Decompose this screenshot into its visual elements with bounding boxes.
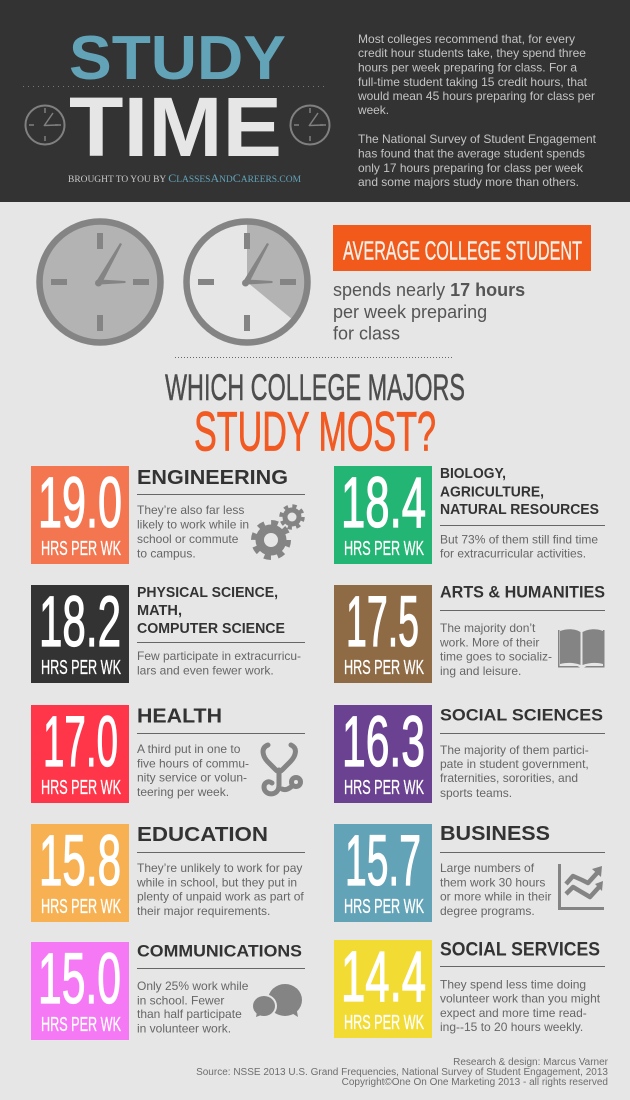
description: The majority of them partici- (440, 743, 589, 757)
icon: large clock, full (40, 222, 160, 342)
description: volunteer work than you might (440, 992, 601, 1006)
heading: ARTS & HUMANITIES (440, 582, 605, 602)
panel: arts and humanities (334, 582, 605, 683)
heading: BUSINESS (440, 823, 550, 845)
description: lars and even fewer work. (137, 664, 274, 678)
stat: 18.4 hours (334, 464, 432, 564)
stat: 19.0 hours: 19.0 (38, 464, 122, 543)
footer credits: Source: NSSE 2013 U.S. Grand Frequencies, National Survey of Student Engagement, 2013 (196, 1067, 608, 1078)
heading: which college majors study most: WHICH COLLEGE MAJORS (165, 367, 465, 408)
heading (440, 466, 599, 518)
footer credits: Research & design: Marcus Varner (453, 1057, 609, 1068)
stat: 16.3 hours (334, 703, 432, 803)
description: They spend less time doing (440, 978, 586, 992)
description: in volunteer work. (137, 1022, 231, 1036)
description: Few participate in extracurricu- (137, 649, 301, 663)
footer credits: Copyright©One On One Marketing 2013 - all rights reserved (342, 1077, 608, 1088)
panel: business (334, 822, 605, 922)
intro paragraph 2: only 17 hours preparing for class per week (358, 161, 584, 175)
stat: 17.0 hours (31, 703, 129, 803)
description: while in school, but they put in (136, 876, 297, 890)
stat: 15.0 hours: HRS PER WK (41, 1014, 121, 1036)
description (440, 532, 598, 560)
description (136, 861, 304, 918)
icon: small clock right (290, 106, 330, 144)
description: pate in student government, (440, 757, 589, 771)
heading: COMMUNICATIONS (137, 942, 302, 960)
description: They’re also far less (137, 503, 244, 517)
description: than half participate (137, 1007, 242, 1021)
stat: 18.4 hours: HRS PER WK (344, 538, 424, 560)
footer credits (196, 1057, 609, 1088)
description: their major requirements. (137, 904, 270, 918)
stat: 15.0 hours: 15.0 (38, 940, 121, 1019)
stat: 19.0 hours (31, 464, 129, 564)
stat: 17.0 hours: 17.0 (43, 703, 118, 782)
stat: 15.8 hours: HRS PER WK (41, 896, 121, 918)
description: ing and leisure. (440, 664, 521, 678)
description: Large numbers of (440, 861, 535, 875)
heading: EDUCATION (137, 824, 268, 846)
description (440, 743, 589, 800)
description: They’re unlikely to work for pay (137, 861, 302, 875)
panel: engineering (31, 464, 305, 564)
description: ing--15 to 20 hours weekly. (440, 1020, 583, 1034)
description: work. More of their (439, 636, 539, 650)
description: five hours of commu- (137, 756, 249, 770)
description (440, 861, 551, 918)
intro paragraph 1: hours per week preparing for class. For a (358, 60, 577, 74)
intro paragraph 1: credit hour students take, they spend three (358, 46, 586, 60)
stat: 18.4 hours: 18.4 (341, 464, 426, 543)
icon: small clock left (26, 106, 64, 144)
description: in school. Fewer (137, 994, 224, 1008)
description: sports teams. (440, 786, 512, 800)
callout: average college student: per week preparing (333, 302, 487, 322)
callout: average college student: for class (333, 324, 400, 344)
description: fraternities, sororities, and (440, 771, 578, 785)
description (137, 979, 249, 1036)
description (440, 978, 601, 1034)
title: Time: TIME (69, 80, 282, 174)
heading: HEALTH (137, 706, 222, 728)
heading: NATURAL RESOURCES (440, 502, 599, 518)
description: them work 30 hours (440, 876, 545, 890)
description: time goes to socializ- (440, 650, 552, 664)
stat: 16.3 hours: HRS PER WK (344, 777, 424, 799)
description (137, 503, 249, 560)
panel: header (0, 0, 630, 202)
stat: 15.8 hours (31, 822, 129, 922)
icon: large clock, 17 hours wedge (186, 222, 308, 342)
icon: line chart with arrows (558, 864, 604, 910)
panel: social sciences (334, 703, 605, 803)
stat: 14.4 hours: HRS PER WK (344, 1012, 424, 1034)
description: expect and more time read- (440, 1006, 587, 1020)
intro paragraph 1: week. (357, 103, 389, 117)
intro paragraph 1: Most colleges recommend that, for every (358, 32, 575, 46)
heading: BIOLOGY, (440, 466, 506, 482)
callout: average college student (333, 225, 591, 344)
intro paragraph 2: and some majors study more than others. (358, 175, 579, 189)
panel: physical science (31, 583, 305, 683)
intro paragraph 1: would mean 45 hours preparing for class per (357, 89, 595, 103)
description: plenty of unpaid work as part of (137, 890, 304, 904)
heading: MATH, (137, 603, 182, 619)
callout: average college student: spends nearly 17 hours (333, 280, 525, 300)
description (439, 621, 552, 678)
stat: 18.2 hours: 18.2 (39, 583, 121, 662)
intro paragraph 2 (358, 132, 597, 189)
credit line: BROUGHT TO YOU BY CLASSESANDCAREERS.COM (68, 171, 302, 185)
description: But 73% of them still find time (440, 532, 598, 546)
heading: COMPUTER SCIENCE (137, 621, 285, 637)
stat: 16.3 hours: 16.3 (342, 703, 425, 782)
stat: 14.4 hours: 14.4 (341, 938, 426, 1017)
heading: which college majors study most (165, 367, 465, 462)
panel: education (31, 822, 305, 922)
intro paragraph 2: The National Survey of Student Engagement (358, 132, 597, 146)
description: teering per week. (137, 785, 229, 799)
icon: stethoscope (263, 745, 300, 794)
heading: which college majors study most: STUDY MOST? (194, 400, 436, 462)
description: The majority don’t (440, 621, 536, 635)
stat: 17.5 hours: 17.5 (346, 583, 419, 662)
icon: open book (558, 629, 604, 668)
stat: 19.0 hours: HRS PER WK (41, 538, 121, 560)
icon: speech bubbles (251, 984, 302, 1018)
description: degree programs. (440, 904, 535, 918)
description: likely to work while in (137, 518, 249, 532)
stat: 14.4 hours (334, 938, 432, 1038)
heading: PHYSICAL SCIENCE, (137, 585, 278, 601)
heading: SOCIAL SERVICES (440, 940, 600, 960)
panel: social services (334, 938, 605, 1038)
stat: 15.0 hours (31, 940, 129, 1040)
stat: 15.7 hours (334, 822, 432, 922)
intro paragraph 2: has found that the average student spends (358, 146, 585, 160)
stat: 17.5 hours (334, 583, 432, 683)
stat: 15.7 hours: 15.7 (345, 822, 421, 901)
stat: 18.2 hours: HRS PER WK (41, 657, 121, 679)
stat: 15.8 hours: 15.8 (39, 822, 121, 901)
title: Study: STUDY (69, 24, 286, 93)
heading: ENGINEERING (137, 467, 288, 489)
description: A third put in one to (137, 742, 241, 756)
description (137, 649, 301, 678)
panel: communications (31, 940, 305, 1040)
description: Only 25% work while (137, 979, 249, 993)
stat: 17.5 hours: HRS PER WK (344, 657, 424, 679)
description: to campus. (137, 546, 196, 560)
panel: health (31, 703, 305, 803)
intro paragraph 1: full-time student taking 15 credit hours, that (358, 75, 588, 89)
panel: biology (334, 464, 605, 564)
description: nity service or volun- (137, 770, 247, 784)
stat: 18.2 hours (31, 583, 129, 683)
heading: AGRICULTURE, (440, 484, 544, 500)
description: school or commute (137, 532, 239, 546)
stat: 17.0 hours: HRS PER WK (41, 777, 121, 799)
description: or more while in their (440, 890, 551, 904)
icon: gears (254, 506, 302, 557)
stat: 15.7 hours: HRS PER WK (344, 896, 424, 918)
description: for extracurricular activities. (440, 546, 586, 560)
intro paragraph 1 (357, 32, 595, 117)
description (137, 742, 249, 799)
heading (137, 585, 285, 637)
heading: SOCIAL SCIENCES (440, 706, 603, 724)
